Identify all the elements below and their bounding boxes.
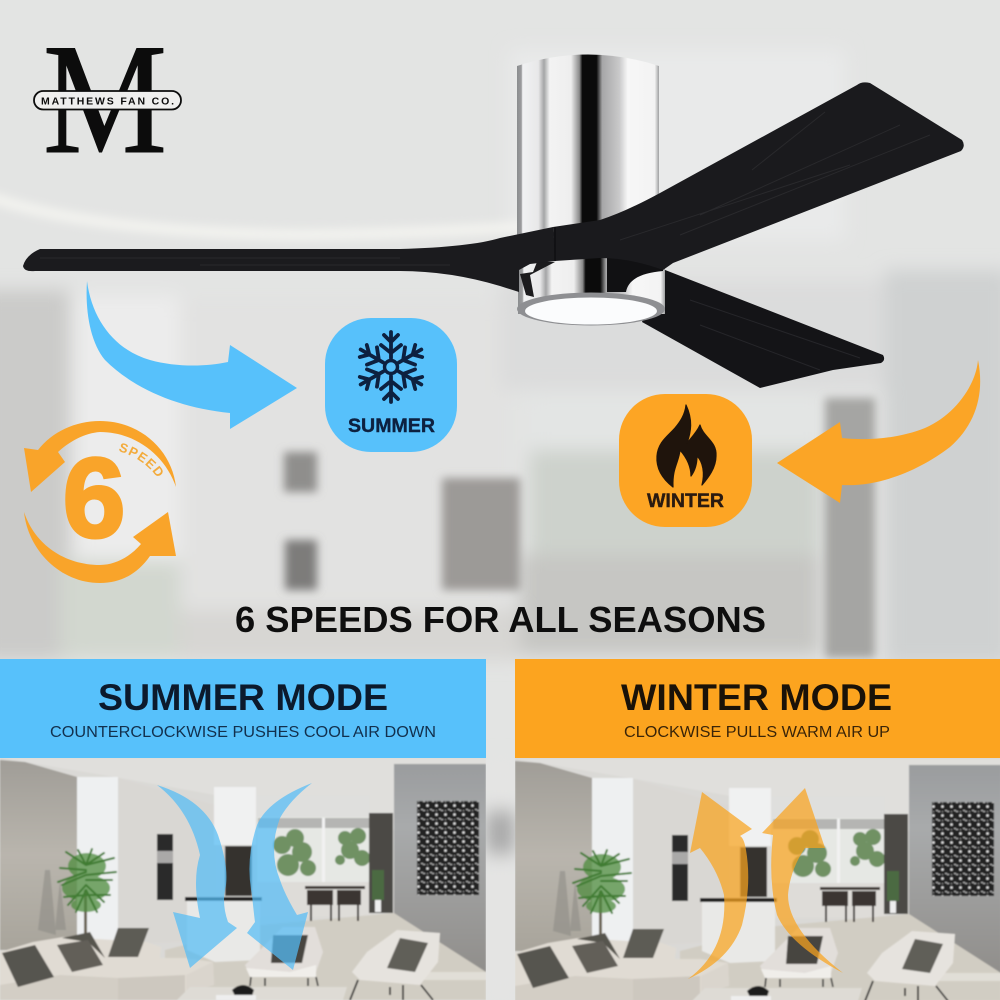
blue summer arrow bbox=[87, 281, 297, 429]
number six: 6 bbox=[63, 435, 125, 561]
photo: summer room with cool air arrows bbox=[0, 755, 486, 1000]
icon: flame bbox=[657, 405, 716, 487]
brand logo: MATTHEWS FAN CO. bbox=[41, 96, 174, 108]
main heading: 6 SPEEDS FOR ALL SEASONS bbox=[235, 599, 766, 640]
brand logo: M bbox=[43, 12, 167, 187]
panel: winter mode bbox=[515, 659, 1000, 758]
summer badge: SUMMER bbox=[348, 415, 435, 437]
panel: summer mode: COUNTERCLOCKWISE PUSHES COOL AIR DOWN bbox=[50, 724, 436, 741]
six speed icon bbox=[24, 421, 176, 583]
left blade bbox=[23, 227, 556, 292]
panel: summer mode: SUMMER MODE bbox=[98, 677, 388, 718]
winter badge bbox=[619, 394, 752, 527]
fan canopy bbox=[517, 54, 659, 270]
orange winter arrow bbox=[777, 360, 980, 503]
photo: winter room with warm air arrows bbox=[515, 756, 1000, 1000]
icon: snowflake bbox=[356, 332, 426, 402]
panel: winter mode: WINTER MODE bbox=[621, 677, 892, 718]
right blade bbox=[553, 82, 964, 270]
bottom circular arrow bbox=[24, 512, 176, 583]
hub with light bbox=[517, 258, 665, 326]
summer badge bbox=[325, 318, 457, 452]
speed label: SPEED bbox=[119, 443, 163, 476]
blue air arrows bbox=[157, 783, 312, 970]
winter badge: WINTER bbox=[647, 490, 724, 512]
top circular arrow bbox=[24, 421, 176, 492]
orange air arrows bbox=[688, 788, 843, 979]
panel: winter mode: CLOCKWISE PULLS WARM AIR UP bbox=[624, 724, 890, 741]
panel: summer mode bbox=[0, 659, 486, 758]
lower blade bbox=[642, 268, 884, 388]
ceiling fan bbox=[23, 54, 964, 388]
